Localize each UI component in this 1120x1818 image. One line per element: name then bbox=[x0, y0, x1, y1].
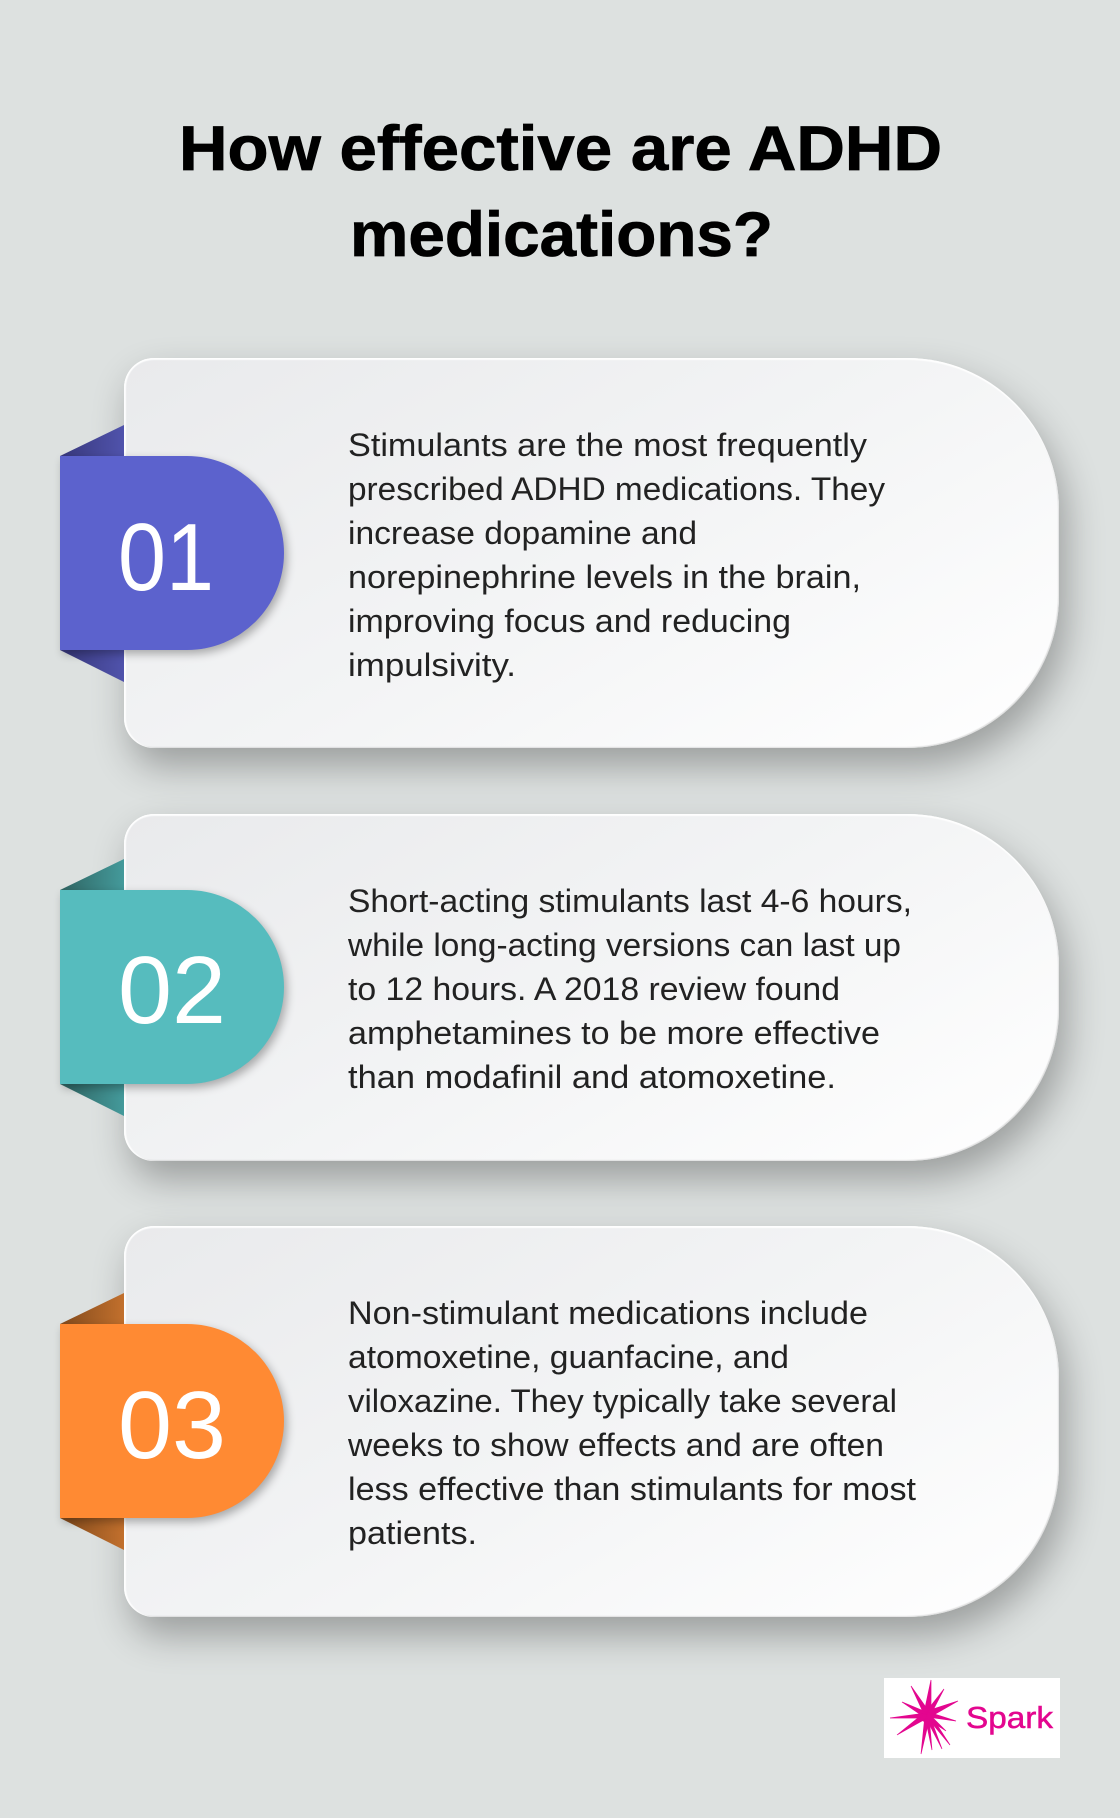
text block and number bbox=[118, 883, 912, 1095]
body text: atomoxetine, guanfacine, and bbox=[348, 1339, 789, 1375]
body text: impulsivity. bbox=[348, 647, 516, 683]
body text: while long-acting versions can last up bbox=[347, 927, 901, 963]
number badge 03 bbox=[60, 1324, 284, 1518]
body text: Short-acting stimulants last 4-6 hours, bbox=[348, 883, 912, 919]
body text: Non-stimulant medications include bbox=[348, 1295, 868, 1331]
fold: bottom bbox=[60, 1084, 124, 1116]
card background bbox=[124, 814, 1059, 1161]
body text: Stimulants are the most frequently bbox=[348, 427, 867, 463]
body text: improving focus and reducing bbox=[348, 603, 791, 639]
fold: bottom bbox=[60, 1518, 124, 1550]
body text: weeks to show effects and are often bbox=[347, 1427, 884, 1463]
body text: norepinephrine levels in the brain, bbox=[348, 559, 861, 595]
card background bbox=[124, 358, 1059, 748]
body text bbox=[348, 427, 885, 683]
body text: less effective than stimulants for most bbox=[348, 1471, 916, 1507]
body text: increase dopamine and bbox=[348, 515, 697, 551]
body text: amphetamines to be more effective bbox=[348, 1015, 880, 1051]
text block and number bbox=[118, 1295, 916, 1551]
body text: patients. bbox=[348, 1515, 477, 1551]
panel: stimulants bbox=[58, 355, 1087, 787]
number 01: 01 bbox=[118, 504, 214, 611]
number badge 01 bbox=[60, 456, 284, 650]
wordmark: Spark bbox=[966, 1700, 1054, 1735]
body text bbox=[347, 1295, 916, 1551]
number 02: 02 bbox=[118, 937, 226, 1044]
panel: duration bbox=[58, 811, 1087, 1200]
logo: Spark bbox=[884, 1678, 1060, 1758]
body text bbox=[347, 883, 912, 1095]
body text: prescribed ADHD medications. They bbox=[348, 471, 885, 507]
fold: top bbox=[60, 1293, 124, 1324]
text block and number bbox=[118, 427, 885, 683]
fold: bottom bbox=[60, 650, 124, 682]
fold: top bbox=[60, 425, 124, 456]
number badge 02 bbox=[60, 890, 284, 1084]
title: medications? bbox=[350, 200, 773, 270]
title: How effective are ADHD bbox=[179, 114, 942, 184]
icon: spark star bbox=[890, 1680, 958, 1754]
panel: non-stimulants bbox=[58, 1223, 1087, 1656]
title bbox=[179, 114, 942, 270]
body text: viloxazine. They typically take several bbox=[348, 1383, 897, 1419]
fold: top bbox=[60, 859, 124, 890]
body text: to 12 hours. A 2018 review found bbox=[348, 971, 840, 1007]
number 03: 03 bbox=[118, 1372, 226, 1479]
body text: than modafinil and atomoxetine. bbox=[348, 1059, 836, 1095]
card background bbox=[124, 1226, 1059, 1617]
